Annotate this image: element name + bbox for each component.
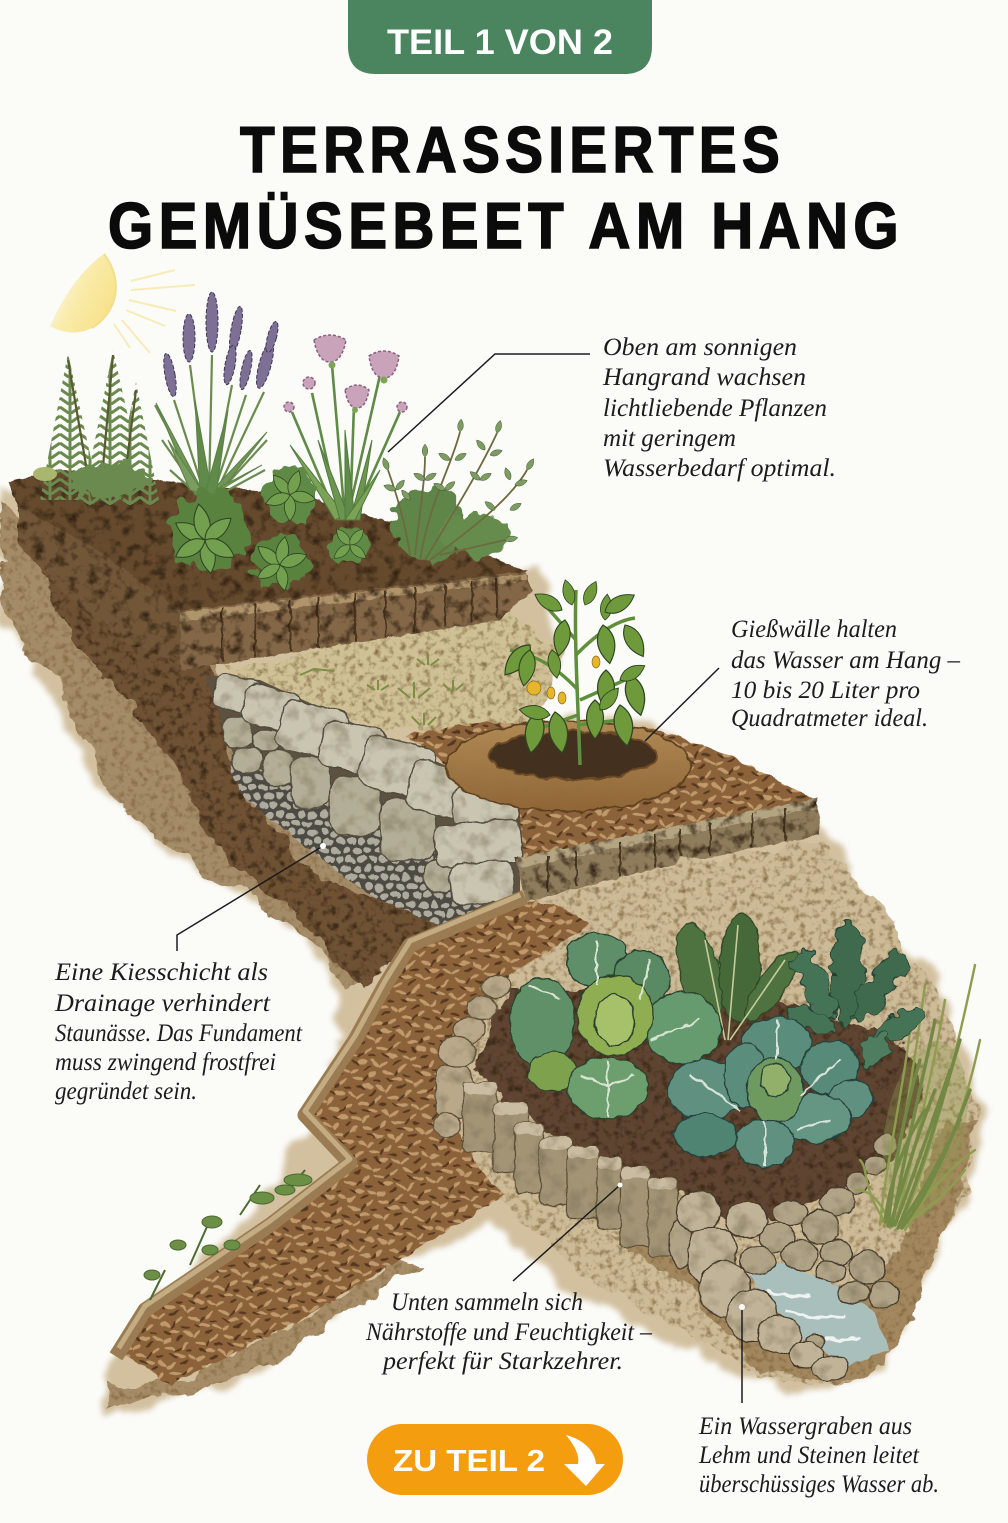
callout: sunny top of slope: Wasserbedarf optimal. (603, 455, 836, 482)
plant: chard (668, 912, 808, 1040)
callout: watering walls: Gießwälle halten (731, 616, 897, 643)
plant: chives (284, 335, 407, 520)
small seedlings near path (144, 1170, 312, 1300)
callout: sunny top of slope: lichtliebende Pflanzen (603, 395, 827, 422)
callout: watering walls: Quadratmeter ideal. (731, 705, 928, 732)
icon: curved arrow down (564, 1435, 605, 1486)
bed edge: stones and posts (434, 976, 678, 1257)
callout: sunny top of slope: Hangrand wachsen (602, 364, 806, 391)
callout: water ditch (698, 1304, 939, 1498)
top badge: Teil 1 von 2: TEIL 1 VON 2 (387, 23, 613, 62)
callout: watering walls (645, 616, 960, 741)
drainage rocks (669, 1134, 899, 1380)
plant: lavender (155, 292, 280, 495)
upper terrace: timber retaining wall (18, 505, 532, 670)
plant: tomato (498, 578, 650, 765)
title: TERRASSIERTES (240, 113, 785, 186)
water channel (748, 1263, 890, 1367)
callout: watering walls: das Wasser am Hang – (731, 647, 960, 674)
brown ground below the path (110, 1260, 420, 1410)
plant: cabbage left (510, 933, 721, 1119)
callout: gravel drainage (54, 843, 326, 1105)
callout: watering walls: 10 bis 20 Liter pro (731, 677, 920, 704)
illustration: light soil slope (0, 500, 400, 985)
callout: water ditch: Lehm und Steinen leitet (698, 1442, 920, 1469)
plant: thyme (381, 419, 536, 561)
title: GEMÜSEBEET AM HANG (108, 189, 904, 262)
illustration: soil wash under the terraces (0, 490, 985, 1420)
callout: nutrients at the bottom (365, 1182, 652, 1375)
button: zu Teil 2 (367, 1424, 623, 1495)
gravel drainage layer (228, 765, 495, 930)
backing soil behind the stone wall (205, 675, 520, 925)
icon: sun (50, 254, 195, 353)
tall grass tuft (856, 965, 980, 1230)
callout: sunny top of slope: Oben am sonnigen (603, 334, 797, 361)
plant: low leafy herbs (172, 465, 370, 592)
middle terrace: dry grass surface (225, 612, 560, 740)
callout: water ditch: Ein Wassergraben aus (698, 1413, 912, 1440)
illustration: dark soil band below the wall (20, 520, 480, 985)
callout: gravel drainage: muss zwingend frostfrei (55, 1049, 276, 1076)
wooden path edging (120, 896, 518, 1350)
brown ground around the ditch (610, 1120, 975, 1385)
plant: rosemary (33, 350, 160, 505)
lower terrace: dry ground (430, 838, 975, 1385)
patches of grass on terrace (300, 654, 463, 725)
mulch path (125, 900, 590, 1385)
plant: kale (782, 921, 929, 1073)
dry stone wall (210, 672, 523, 907)
title (108, 113, 904, 262)
callout: gravel drainage: Eine Kiesschicht als (54, 959, 268, 986)
callout: sunny top of slope: mit geringem (603, 425, 736, 452)
upper terrace: soil surface (8, 470, 528, 612)
plant: cabbage right (668, 1017, 874, 1167)
callout: gravel drainage: Drainage verhindert (54, 990, 271, 1017)
lower bed: dark soil (470, 985, 925, 1225)
callout: water ditch: überschüssiges Wasser ab. (699, 1471, 939, 1498)
callout: gravel drainage: Staunässe. Das Fundament (55, 1020, 303, 1047)
middle terrace: wooden edge posts (516, 798, 820, 902)
middle terrace: mulch surface (405, 722, 815, 865)
watering wall ring around tomato (446, 721, 690, 811)
callout: nutrients at the bottom: Nährstoffe und Feuchtigkeit – (365, 1319, 652, 1346)
callout: nutrients at the bottom: perfekt für Starkzehrer. (381, 1348, 623, 1375)
top badge: Teil 1 von 2 (348, 0, 652, 74)
callout: sunny top of slope (388, 334, 836, 482)
button: zu Teil 2: ZU TEIL 2 (393, 1443, 545, 1478)
callout: nutrients at the bottom: Unten sammeln sich (391, 1289, 583, 1316)
callout: gravel drainage: gegründet sein. (55, 1078, 197, 1105)
